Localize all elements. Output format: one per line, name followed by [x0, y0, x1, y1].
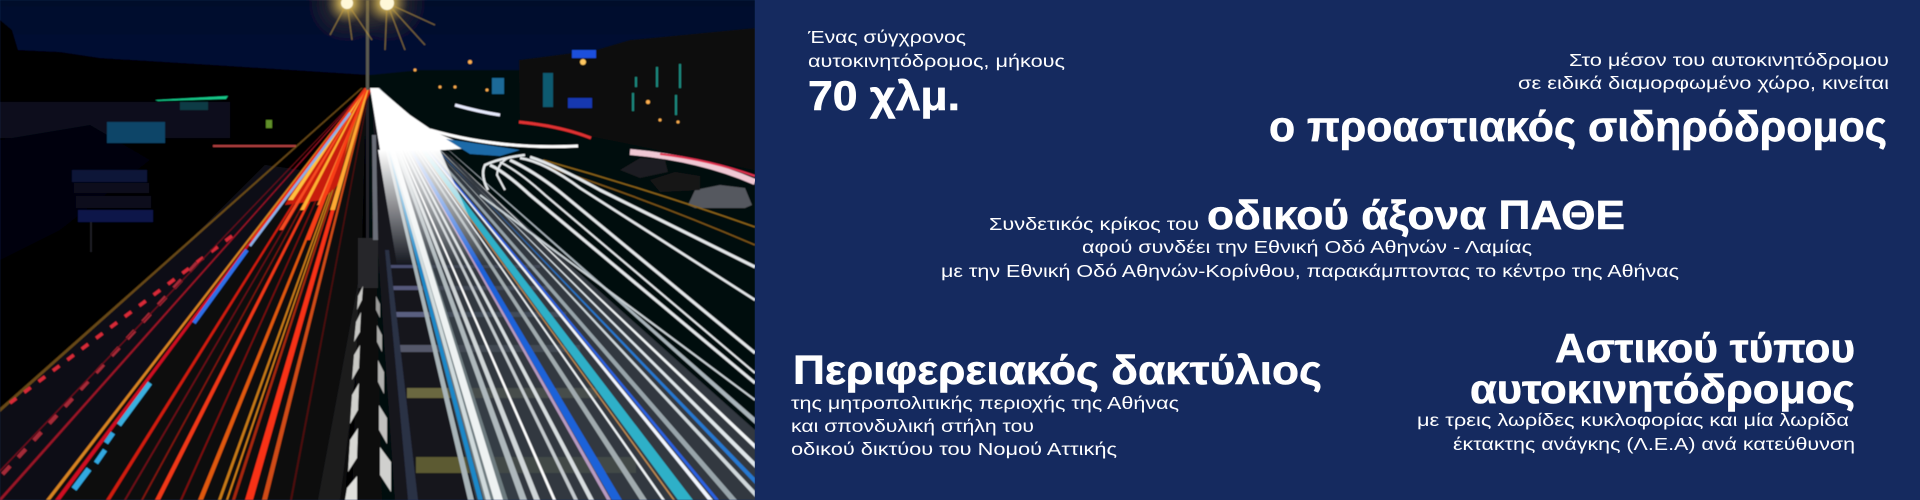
white and blue headlight trails [370, 88, 755, 500]
text block: PATHE axis: οδικού άξονα ΠΑΘΕ [1207, 192, 1625, 238]
text block: ring road [791, 347, 1322, 459]
text block: PATHE axis: αφού συνδέει την Εθνική Οδό Αθηνών - Λαμίας [1082, 237, 1532, 257]
blue reflection dashes [74, 113, 350, 489]
text block: suburban railway: σε ειδικά διαμορφωμένο χώρο, κινείται [1518, 73, 1889, 93]
text block: urban motorway: έκτακτης ανάγκης (Λ.Ε.Α) ανά κατεύθυνση [1453, 434, 1855, 454]
ground left [0, 20, 370, 500]
text block: length: Ένας σύγχρονος [807, 27, 966, 47]
side street trails [455, 105, 755, 245]
text block: ring road: της μητροπολιτικής περιοχής της Αθήνας [791, 393, 1179, 413]
text block: urban motorway: αυτοκινητόδρομος [1470, 366, 1855, 412]
road sign [72, 170, 153, 252]
text block: suburban railway: ο προαστιακός σιδηρόδρομος [1269, 103, 1887, 151]
text block: ring road: Περιφερειακός δακτύλιος [793, 347, 1322, 393]
text block: urban motorway: με τρεις λωρίδες κυκλοφορίας και μία λωρίδα [1417, 410, 1849, 430]
bright blown-out core [370, 88, 472, 150]
red tail-light trails [0, 88, 372, 500]
text block: length: αυτοκινητόδρομος, μήκους [808, 51, 1065, 71]
text block: suburban railway: Στο μέσον του αυτοκινητόδρομου [1569, 50, 1889, 70]
right carriageway [372, 106, 476, 500]
text block: ring road: οδικού δικτύου του Νομού Αττικής [791, 439, 1117, 459]
text block: length [807, 27, 1065, 119]
text block: urban motorway: Αστικού τύπου [1555, 325, 1855, 371]
junction branch trail [430, 130, 578, 147]
treeline and ground right [370, 60, 755, 500]
road lane markings [385, 250, 636, 500]
text block: PATHE axis: με την Εθνική Οδό Αθηνών-Κορίνθου, παρακάμπτοντας το κέντρο της Αθήνας [941, 261, 1679, 281]
building left [0, 96, 296, 260]
text block: length: 70 χλμ. [808, 72, 960, 119]
text block: urban motorway [1417, 325, 1855, 454]
curved trails to the right edge [480, 155, 755, 400]
teal and blue patch at junction [446, 139, 520, 156]
photo: highway light trails at night [0, 0, 755, 500]
text block: PATHE axis: Συνδετικός κρίκος του [989, 214, 1199, 234]
text block: ring road: και σπονδυλική στήλη του [791, 416, 1034, 436]
median barrier with chevrons [345, 88, 391, 500]
bright red and yellow bundle near the horizon [285, 88, 372, 205]
parked cars [620, 158, 752, 208]
street lamp [305, 0, 435, 90]
left carriageway [48, 90, 366, 500]
median shoulder [318, 284, 359, 500]
panel: blue background [755, 0, 1920, 500]
text block: suburban railway [1269, 50, 1889, 151]
left shoulder [0, 165, 300, 500]
text block: PATHE axis [941, 192, 1679, 281]
buildings right [414, 28, 755, 170]
sky [0, 0, 755, 76]
